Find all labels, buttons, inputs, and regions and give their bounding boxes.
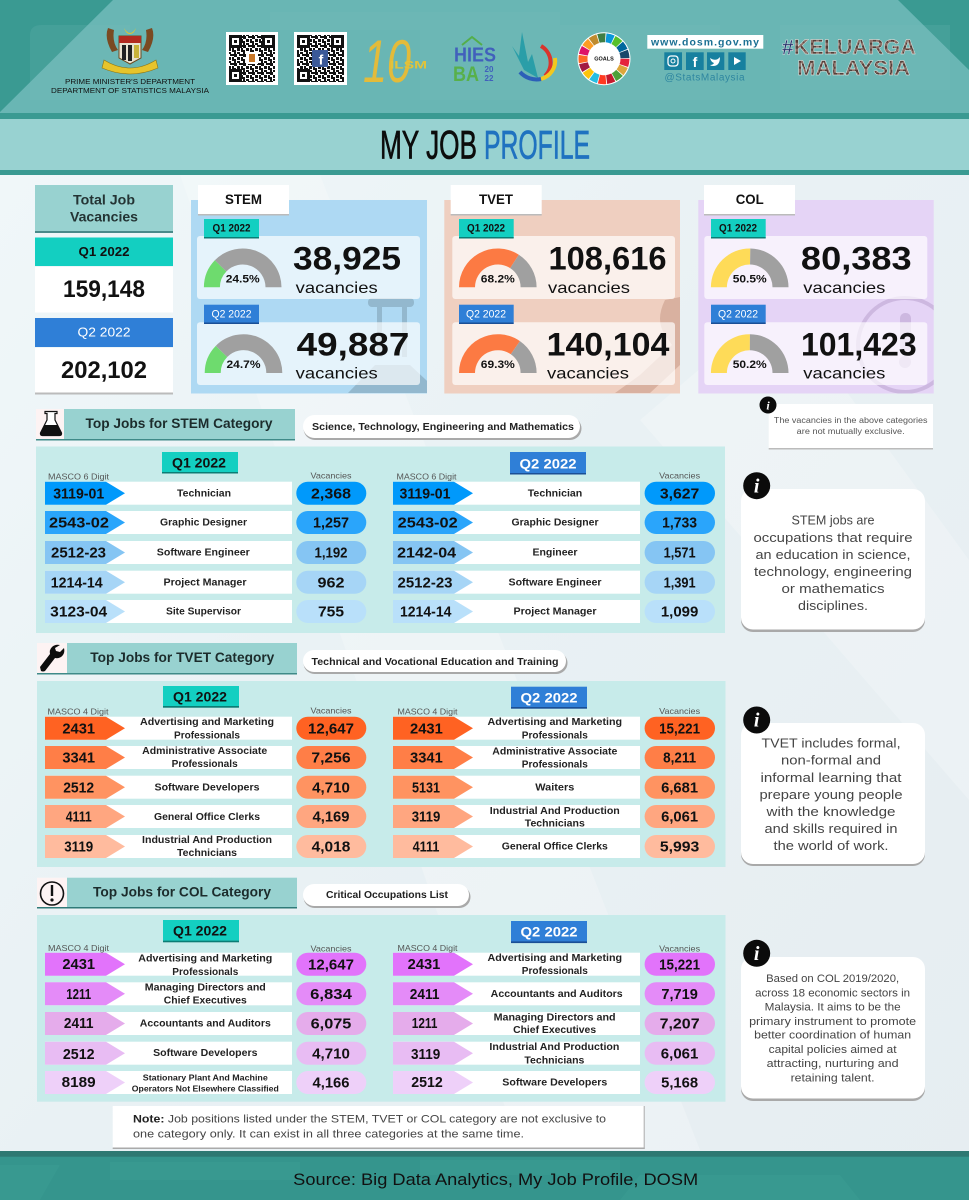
row: Q2 2543-02 Graphic Designer: Graphic Designer: [512, 518, 599, 529]
row: Q2 3119-01 Technician: 3,627: [660, 485, 699, 502]
info box: TVET definition: with the knowledge: [765, 804, 896, 819]
info box: COL definition: across 18 economic sectors in: [755, 988, 910, 1000]
row: Q1 2512 Software Developers: [45, 776, 366, 799]
info box: COL definition: retaining talent.: [791, 1072, 875, 1084]
info box: TVET definition: [741, 706, 925, 866]
definition pill: STEM: [303, 415, 582, 440]
column labels: [48, 471, 700, 482]
row: Q1 2431 Advertising and Marketing Professionals: [45, 717, 366, 742]
hashtag Keluarga Malaysia: [782, 36, 916, 80]
row: Q2 2431 Advertising and Marketing Professionals: Professionals: [522, 966, 588, 977]
row: Q1 2512 Software Developers: 4,710: [312, 1045, 350, 1062]
row: Q1 2543-02 Graphic Designer: 1,257: [313, 515, 349, 532]
row: Q2 1211 Managing Directors and Chief Executives: [393, 1012, 715, 1036]
chip: Q2 2022: [510, 452, 586, 474]
SDG wheel logo: GOALS: [594, 57, 614, 63]
row: Q1 3119-01 Technician: Technician: [177, 488, 231, 499]
row: Q1 3341 Administrative Associate Professionals: 3341: [62, 750, 95, 767]
row: Q2 1214-14 Project Manager: 1214-14: [400, 604, 452, 621]
value: TVET Q1: [548, 241, 666, 297]
table panel: TVET: [37, 681, 726, 867]
row: Q2 2512 Software Developers: Software Developers: [502, 1078, 608, 1089]
info box: TVET definition: prepare young people: [760, 787, 902, 802]
title: MY JOB: [380, 124, 477, 168]
row: Q1 3341 Administrative Associate Professionals: Administrative Associate: [142, 746, 268, 757]
row: Q1 1214-14 Project Manager: Project Manager: [164, 577, 247, 588]
row: Q1 4111 General Office Clerks: [45, 805, 366, 828]
gauge: STEM Q2 24.7%: 24.7%: [226, 359, 261, 371]
row: Q1 3119 Industrial And Production Technicians: 4,018: [312, 839, 350, 856]
QR code: website: [226, 32, 278, 85]
row: Q2 2431 Advertising and Marketing Professionals: Advertising and Marketing: [488, 717, 622, 728]
definition pill: TVET: Technical and Vocational Education and Training: [312, 657, 558, 668]
row: Q2 2431 Advertising and Marketing Professionals: 15,221: [659, 720, 700, 737]
row: Q2 2512-23 Software Engineer: Software Engineer: [508, 577, 602, 588]
website and social media: @StatsMalaysia: [664, 73, 745, 84]
row: Q2 3119 Industrial And Production Technicians: 6,061: [661, 1045, 698, 1062]
value: STEM Q2: vacancies: [296, 365, 378, 382]
title: PROFILE: [484, 124, 590, 168]
info box: TVET definition: and skills required in: [764, 821, 898, 836]
row: Q1 1211 Managing Directors and Chief Executives: Chief Executives: [164, 995, 247, 1006]
panel: total job vacancies: Vacancies: [70, 209, 138, 225]
website and social media: www.dosm.gov.my: [650, 37, 759, 49]
column labels: Vacancies: [310, 943, 352, 953]
panel: total job vacancies: [35, 185, 173, 394]
row: Q1 2512 Software Developers: [45, 1042, 366, 1065]
panel: COL vacancies: Q1 2022: [719, 223, 757, 235]
column labels: [48, 943, 700, 953]
panel: COL vacancies: [698, 185, 952, 394]
row: Q2 2543-02 Graphic Designer: 2543-02: [398, 515, 458, 532]
chip: Q1 2022: Q1 2022: [173, 923, 227, 939]
column labels: MASCO 4 Digit: [398, 707, 458, 717]
panel: TVET vacancies: [444, 185, 680, 394]
row: Q2 2431 Advertising and Marketing Professionals: 2431: [410, 720, 443, 737]
definition pill: TVET: [303, 650, 568, 674]
row: Q2 2142-04 Engineer: 1,571: [664, 545, 696, 562]
value: COL Q2: 101,423: [801, 327, 917, 363]
row: Q1 2431 Advertising and Marketing Professionals: Advertising and Marketing: [140, 717, 274, 728]
gauge: STEM Q1 24.5%: 24.5%: [226, 273, 260, 285]
value: STEM Q2: [296, 327, 409, 382]
row: Q2 1214-14 Project Manager: [393, 600, 715, 623]
column labels: Vacancies: [310, 706, 352, 716]
row: Q2 3119 Industrial And Production Technicians: 3119: [412, 809, 440, 826]
HIES BA 2022 logo: BA: [453, 63, 479, 86]
row: Q2 2431 Advertising and Marketing Professionals: Professionals: [522, 730, 588, 741]
note: categories not exclusive: [113, 1106, 645, 1149]
row: Q1 2512-23 Software Engineer: [45, 541, 366, 564]
row: Q2 2512 Software Developers: 5,168: [661, 1075, 698, 1092]
row: Q1 2543-02 Graphic Designer: [45, 511, 366, 534]
row: Q2 5131 Waiters: Waiters: [535, 782, 575, 793]
statistics day logo: [512, 32, 555, 79]
value: TVET Q1: vacancies: [548, 280, 630, 297]
row: Q1 3119 Industrial And Production Technicians: [45, 835, 366, 859]
row: Q2 2543-02 Graphic Designer: 1,733: [662, 515, 697, 532]
value: COL Q2: [801, 327, 917, 382]
row: Q1 2431 Advertising and Marketing Professionals: 12,647: [308, 956, 354, 973]
gauge: TVET Q1 68.2%: [459, 249, 537, 287]
info box: STEM definition: occupations that require: [754, 530, 912, 545]
row: Q2 3119 Industrial And Production Technicians: [393, 805, 715, 830]
row: Q1 3119-01 Technician: [45, 482, 366, 505]
gauge: TVET Q2 69.3%: 69.3%: [481, 359, 515, 371]
value: TVET Q2: vacancies: [547, 365, 629, 382]
info box: TVET definition: TVET includes formal,: [762, 735, 900, 750]
gauge: COL Q2 50.2%: 50.2%: [733, 359, 767, 371]
row: Q2 1211 Managing Directors and Chief Executives: 7,207: [660, 1016, 700, 1033]
panel: COL vacancies: Q2 2022: [718, 309, 758, 321]
SDG wheel logo: [578, 32, 630, 85]
info box: TVET definition: informal learning that: [760, 770, 902, 785]
row: Q1 1211 Managing Directors and Chief Executives: Managing Directors and: [145, 982, 266, 993]
note: categories not mutually exclusive: The vacancies in the above categories: [774, 416, 928, 425]
row: Q2 2543-02 Graphic Designer: [393, 511, 715, 534]
row: Q2 5131 Waiters: 5131: [412, 779, 440, 796]
info box: TVET definition: the world of work.: [774, 838, 888, 853]
row: Q1 3123-04 Site Supervisor: 755: [318, 604, 344, 621]
definition pill: COL: [303, 884, 470, 908]
row: Q1 4111 General Office Clerks: 4111: [66, 809, 92, 826]
row: Q2 3119 Industrial And Production Technicians: Industrial And Production: [489, 1042, 619, 1053]
row: Q1 2431 Advertising and Marketing Professionals: Advertising and Marketing: [138, 953, 272, 964]
row: Q2 3119 Industrial And Production Technicians: Technicians: [524, 1056, 585, 1067]
row: Q2 5131 Waiters: 6,681: [661, 779, 698, 796]
row: Q1 3119 Industrial And Production Technicians: 3119: [64, 839, 93, 856]
note: categories not mutually exclusive: i: [766, 399, 770, 413]
government crest logo: [102, 28, 158, 74]
column labels: MASCO 4 Digit: [48, 707, 109, 717]
value: COL Q2: vacancies: [803, 365, 885, 382]
chip: Q2 2022: Q2 2022: [520, 690, 578, 706]
row: Q1 2543-02 Graphic Designer: Graphic Designer: [160, 518, 247, 529]
value: COL Q1: 80,383: [801, 241, 912, 277]
row: Q2 3119 Industrial And Production Technicians: 3119: [411, 1046, 440, 1063]
QR code: Facebook: f: [319, 52, 324, 68]
HIES BA 2022 logo: [453, 37, 496, 86]
info box: STEM definition: disciplines.: [798, 598, 868, 613]
chip: Q1 2022: Q1 2022: [173, 689, 227, 705]
value: COL Q1: vacancies: [803, 280, 885, 297]
row: Q2 3119 Industrial And Production Technicians: [393, 1042, 715, 1066]
ILSM 10th anniversary logo: ILSM: [390, 60, 427, 72]
row: Q2 3341 Administrative Associate Professionals: 8,211: [663, 750, 696, 767]
chip: Q1 2022: [163, 686, 239, 708]
info box: COL definition: [741, 940, 925, 1101]
header band: [0, 0, 969, 113]
row: Q1 2411 Accountants and Auditors: Accountants and Auditors: [140, 1018, 271, 1030]
info box: COL definition: i: [754, 943, 760, 965]
row: Q2 2411 Accountants and Auditors: 7,719: [661, 986, 698, 1003]
info box: STEM definition: technology, engineering: [754, 564, 912, 579]
chip: Q1 2022: [162, 452, 238, 474]
row: Q1 1211 Managing Directors and Chief Executives: 6,834: [310, 986, 353, 1003]
row: Q2 2142-04 Engineer: Engineer: [532, 548, 578, 559]
row: Q1 2411 Accountants and Auditors: 2411: [64, 1015, 94, 1032]
row: Q1 2512-23 Software Engineer: 1,192: [314, 545, 348, 562]
row: Q1 2512 Software Developers: 2512: [63, 1046, 95, 1063]
chip: Q1 2022: Q1 2022: [172, 455, 226, 471]
row: Q2 1211 Managing Directors and Chief Executives: 1211: [412, 1015, 437, 1032]
row: Q2 3341 Administrative Associate Professionals: 3341: [410, 750, 443, 767]
row: Q2 2431 Advertising and Marketing Professionals: [393, 717, 715, 742]
row: Q2 4111 General Office Clerks: 5,993: [660, 839, 699, 856]
HIES BA 2022 logo: HIES: [454, 45, 496, 67]
note: categories not exclusive: Note: Job positions listed under the STEM, TVET or COL category are not exclusive to: [133, 1114, 606, 1126]
row: Q2 1211 Managing Directors and Chief Executives: Managing Directors and: [494, 1012, 616, 1023]
row: Q2 2431 Advertising and Marketing Professionals: [393, 953, 715, 977]
info box: STEM definition: [741, 472, 925, 632]
chip: Q1 2022: [163, 920, 239, 942]
row: Q2 2512 Software Developers: [393, 1071, 715, 1094]
row: Q2 3119 Industrial And Production Technicians: Industrial And Production: [490, 806, 620, 817]
row: Q1 2512-23 Software Engineer: Software Engineer: [157, 548, 250, 559]
row: Q2 2512-23 Software Engineer: 1,391: [664, 574, 696, 591]
row: Q2 4111 General Office Clerks: General Office Clerks: [502, 841, 608, 852]
source text: Source: Big Data Analytics, My Job Profile, DOSM: [293, 1170, 698, 1189]
HIES BA 2022 logo: 22: [485, 74, 494, 83]
website and social media: f: [693, 54, 698, 70]
department name: [51, 77, 209, 95]
row: Q1 8189 Stationary Plant And Machine Operators Not Elsewhere Classified: Operators Not Elsewhere Classified: [132, 1084, 279, 1094]
chip: Q2 2022: Q2 2022: [520, 924, 578, 940]
row: Q2 3119 Industrial And Production Technicians: Technicians: [525, 818, 585, 829]
column labels: [48, 706, 700, 717]
row: Q1 2431 Advertising and Marketing Professionals: [45, 953, 366, 978]
row: Q2 2431 Advertising and Marketing Professionals: Advertising and Marketing: [488, 953, 622, 964]
row: Q1 3119 Industrial And Production Technicians: Industrial And Production: [142, 835, 272, 846]
chip: Q2 2022: [511, 921, 587, 943]
value: STEM Q1: 38,925: [293, 241, 401, 277]
row: Q1 2431 Advertising and Marketing Professionals: 2431: [62, 956, 95, 973]
HIES BA 2022 logo: 20: [485, 65, 494, 74]
department name: PRIME MINISTER'S DEPARTMENT: [65, 77, 195, 86]
row: Q2 1214-14 Project Manager: 1,099: [661, 604, 698, 621]
row: Q1 8189 Stationary Plant And Machine Operators Not Elsewhere Classified: 8189: [62, 1074, 96, 1091]
row: Q1 2512 Software Developers: Software Developers: [153, 1048, 258, 1059]
column labels: Vacancies: [659, 943, 700, 953]
row: Q1 1214-14 Project Manager: 962: [318, 574, 344, 591]
section heading: TVET: [37, 643, 297, 674]
row: Q1 1211 Managing Directors and Chief Executives: 1211: [66, 986, 91, 1003]
row: Q1 3123-04 Site Supervisor: Site Supervisor: [166, 607, 241, 618]
row: Q1 2512 Software Developers: 4,710: [312, 779, 350, 796]
gauge: COL Q1 50.5%: [711, 248, 788, 287]
row: Q2 3341 Administrative Associate Professionals: Professionals: [522, 759, 588, 770]
row: Q2 2142-04 Engineer: [393, 541, 715, 564]
row: Q1 1211 Managing Directors and Chief Executives: [45, 982, 366, 1006]
table panel: STEM: [36, 446, 725, 633]
panel: STEM vacancies: [191, 185, 440, 394]
value: TVET Q2: [547, 327, 670, 382]
chip: Q2 2022: Q2 2022: [520, 456, 577, 472]
note: categories not mutually exclusive: are not mutually exclusive.: [797, 427, 905, 436]
value: STEM Q1: vacancies: [296, 280, 378, 297]
row: Q1 4111 General Office Clerks: 4,169: [312, 809, 350, 826]
value: STEM Q1: [293, 241, 401, 297]
row: Q1 3119 Industrial And Production Technicians: Technicians: [177, 848, 237, 859]
row: Q2 3119-01 Technician: [393, 482, 715, 505]
row: Q1 8189 Stationary Plant And Machine Operators Not Elsewhere Classified: Stationary Plant And Machine: [143, 1073, 268, 1083]
info box: STEM definition: or mathematics: [782, 581, 885, 596]
panel: total job vacancies: 202,102: [61, 357, 147, 384]
info box: COL definition: primary instrument to promote: [749, 1016, 916, 1028]
panel: total job vacancies: Q1 2022: [78, 244, 130, 259]
definition pill: STEM: Science, Technology, Engineering and Mathematics: [312, 422, 574, 433]
row: Q2 2411 Accountants and Auditors: Accountants and Auditors: [491, 989, 623, 1000]
gauge: STEM Q2 24.7%: [205, 334, 282, 373]
column labels: MASCO 4 Digit: [398, 943, 458, 953]
row: Q1 3341 Administrative Associate Professionals: [45, 746, 366, 770]
panel: TVET vacancies: TVET: [479, 192, 514, 207]
column labels: MASCO 6 Digit: [396, 472, 457, 482]
row: Q1 3119-01 Technician: 3119-01: [53, 485, 104, 502]
row: Q2 4111 General Office Clerks: [393, 835, 715, 858]
row: Q2 2431 Advertising and Marketing Professionals: 2431: [408, 956, 440, 973]
panel: COL vacancies: COL: [736, 192, 764, 207]
row: Q1 2411 Accountants and Auditors: [45, 1012, 366, 1035]
row: Q1 3123-04 Site Supervisor: 3123-04: [50, 604, 108, 621]
value: TVET Q2: 140,104: [547, 327, 670, 363]
row: Q2 2512-23 Software Engineer: 2512-23: [398, 574, 452, 591]
value: STEM Q2: 49,887: [297, 327, 409, 363]
gauge: COL Q1 50.5%: 50.5%: [733, 273, 767, 285]
row: Q1 2431 Advertising and Marketing Professionals: 12,647: [308, 720, 354, 737]
column labels: Vacancies: [310, 471, 352, 481]
info box: STEM definition: STEM jobs are: [792, 512, 874, 527]
row: Q2 2512-23 Software Engineer: [393, 571, 715, 594]
row: Q2 1214-14 Project Manager: Project Manager: [514, 607, 597, 618]
section heading: STEM: [36, 409, 295, 440]
panel: STEM vacancies: STEM: [225, 192, 262, 207]
row: Q1 2512 Software Developers: 2512: [63, 779, 94, 796]
section heading: COL: Top Jobs for COL Category: [93, 884, 271, 899]
row: Q1 3341 Administrative Associate Professionals: Professionals: [172, 759, 238, 770]
row: Q2 3119 Industrial And Production Technicians: 6,061: [661, 809, 698, 826]
QR code: Facebook: [294, 32, 347, 85]
row: Q1 1214-14 Project Manager: [45, 571, 366, 594]
row: Q2 2431 Advertising and Marketing Professionals: 15,221: [659, 956, 700, 973]
row: Q1 2411 Accountants and Auditors: 6,075: [311, 1016, 351, 1033]
row: Q1 3119-01 Technician: 2,368: [311, 485, 351, 502]
panel: total job vacancies: Total Job: [73, 192, 135, 208]
definition pill: COL: Critical Occupations List: [326, 890, 449, 901]
ILSM 10th anniversary logo: 10: [363, 28, 411, 95]
row: Q1 8189 Stationary Plant And Machine Operators Not Elsewhere Classified: [45, 1071, 366, 1094]
note: categories not mutually exclusive: [760, 396, 933, 450]
gauge: COL Q2 50.2%: [711, 334, 788, 373]
value: COL Q1: [801, 241, 912, 297]
footer band with source: [0, 1151, 969, 1200]
row: Q1 2431 Advertising and Marketing Professionals: Professionals: [174, 730, 240, 741]
gauge: TVET Q2 69.3%: [459, 334, 537, 373]
panel: TVET vacancies: Q1 2022: [467, 223, 505, 235]
section: top jobs COL: [37, 878, 925, 1102]
column labels: Vacancies: [659, 706, 700, 716]
column labels: Vacancies: [659, 471, 700, 481]
row: Q2 2512 Software Developers: 2512: [411, 1074, 443, 1091]
row: Q1 2431 Advertising and Marketing Professionals: Professionals: [172, 967, 239, 978]
info box: TVET definition: non-formal and: [781, 752, 881, 767]
row: Q1 2512 Software Developers: Software Developers: [154, 782, 260, 793]
section: top jobs STEM: [36, 409, 925, 633]
row: Q1 4111 General Office Clerks: General Office Clerks: [154, 812, 260, 823]
section heading: STEM: Top Jobs for STEM Category: [86, 416, 273, 431]
section heading: COL: [37, 878, 297, 908]
info box: STEM definition: i: [754, 475, 760, 497]
note: categories not exclusive: one category only. It can exist in all three categories at the same time.: [133, 1128, 524, 1140]
gauge: TVET Q1 68.2%: 68.2%: [481, 273, 515, 285]
panel: total job vacancies: 159,148: [63, 276, 145, 303]
chip: Q2 2022: [511, 687, 587, 709]
info box: STEM definition: an education in science,: [756, 547, 910, 562]
hashtag Keluarga Malaysia: MALAYSIA: [797, 57, 910, 80]
info box: COL definition: Based on COL 2019/2020,: [766, 973, 899, 985]
section: top jobs TVET: [37, 643, 925, 867]
panel: STEM vacancies: Q1 2022: [212, 223, 250, 235]
info box: COL definition: better coordination of human: [754, 1030, 911, 1042]
hashtag Keluarga Malaysia: #KELUARGA: [782, 36, 916, 59]
gauge: STEM Q1 24.5%: [204, 248, 282, 287]
value: TVET Q1: 108,616: [548, 241, 666, 277]
row: Q1 1214-14 Project Manager: 1214-14: [51, 574, 103, 591]
column labels: MASCO 4 Digit: [48, 943, 110, 953]
department name: DEPARTMENT OF STATISTICS MALAYSIA: [51, 86, 209, 95]
section heading: TVET: Top Jobs for TVET Category: [90, 650, 275, 665]
table panel: COL: [37, 915, 726, 1102]
row: Q2 2411 Accountants and Auditors: [393, 982, 715, 1005]
row: Q2 3341 Administrative Associate Professionals: Administrative Associate: [492, 746, 618, 757]
info box: COL definition: Malaysia. It aims to be the: [765, 1001, 901, 1013]
panel: total job vacancies: Q2 2022: [78, 325, 130, 340]
row: Q1 2543-02 Graphic Designer: 2543-02: [49, 515, 109, 532]
panel: TVET vacancies: Q2 2022: [466, 309, 506, 321]
info box: TVET definition: i: [754, 710, 760, 732]
row: Q1 3123-04 Site Supervisor: [45, 600, 366, 623]
row: Q1 8189 Stationary Plant And Machine Operators Not Elsewhere Classified: 4,166: [312, 1075, 350, 1092]
row: Q2 3341 Administrative Associate Professionals: [393, 746, 715, 770]
panel: STEM vacancies: Q2 2022: [212, 309, 252, 321]
row: Q2 2411 Accountants and Auditors: 2411: [410, 986, 439, 1003]
column labels: MASCO 6 Digit: [48, 472, 110, 482]
row: Q2 2142-04 Engineer: 2142-04: [397, 545, 457, 562]
row: Q2 3119-01 Technician: Technician: [528, 488, 582, 499]
info box: COL definition: attracting, nurturing and: [767, 1058, 899, 1070]
row: Q1 2431 Advertising and Marketing Professionals: 2431: [62, 720, 95, 737]
website and social media: [647, 35, 763, 84]
row: Q2 5131 Waiters: [393, 776, 715, 799]
row: Q1 3341 Administrative Associate Professionals: 7,256: [311, 750, 351, 767]
info box: COL definition: capital policies aimed at: [769, 1044, 897, 1056]
title band: [0, 113, 969, 175]
row: Q2 3119-01 Technician: 3119-01: [400, 485, 450, 502]
row: Q2 4111 General Office Clerks: 4111: [413, 839, 439, 856]
row: Q1 2512-23 Software Engineer: 2512-23: [51, 545, 106, 562]
row: Q2 1211 Managing Directors and Chief Executives: Chief Executives: [513, 1025, 597, 1036]
